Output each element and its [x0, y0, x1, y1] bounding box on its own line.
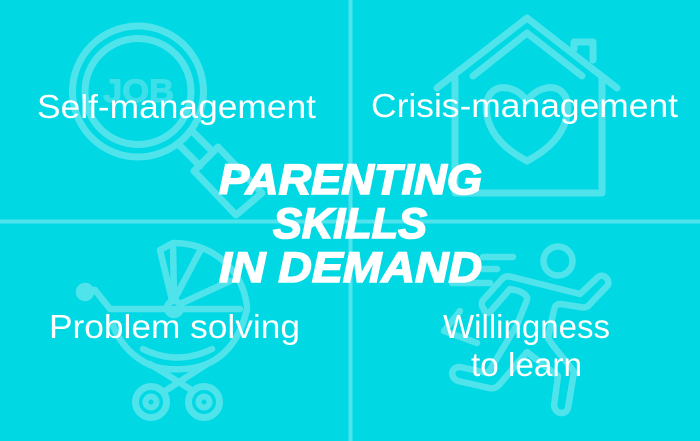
icon: magnifying glass with JOB: [72, 26, 262, 215]
title: IN DEMAND: [219, 244, 482, 292]
label: Self-management: Self-management: [37, 88, 316, 125]
icon: house with heart: [437, 18, 617, 193]
label: Problem solving: Problem solving: [49, 308, 300, 345]
label: Willingness to learn: [443, 308, 610, 383]
title: PARENTING: [219, 156, 482, 204]
label: Willingness to learn: to learn: [471, 346, 582, 383]
title: [219, 156, 482, 292]
label: Crisis-management: Crisis-management: [371, 87, 678, 124]
label: Willingness to learn: Willingness: [443, 308, 610, 345]
title: SKILLS: [273, 200, 427, 248]
icon: running person: [444, 246, 608, 413]
icon: magnifying glass with JOB: JOB: [103, 73, 174, 109]
icon: baby stroller: [79, 243, 247, 418]
